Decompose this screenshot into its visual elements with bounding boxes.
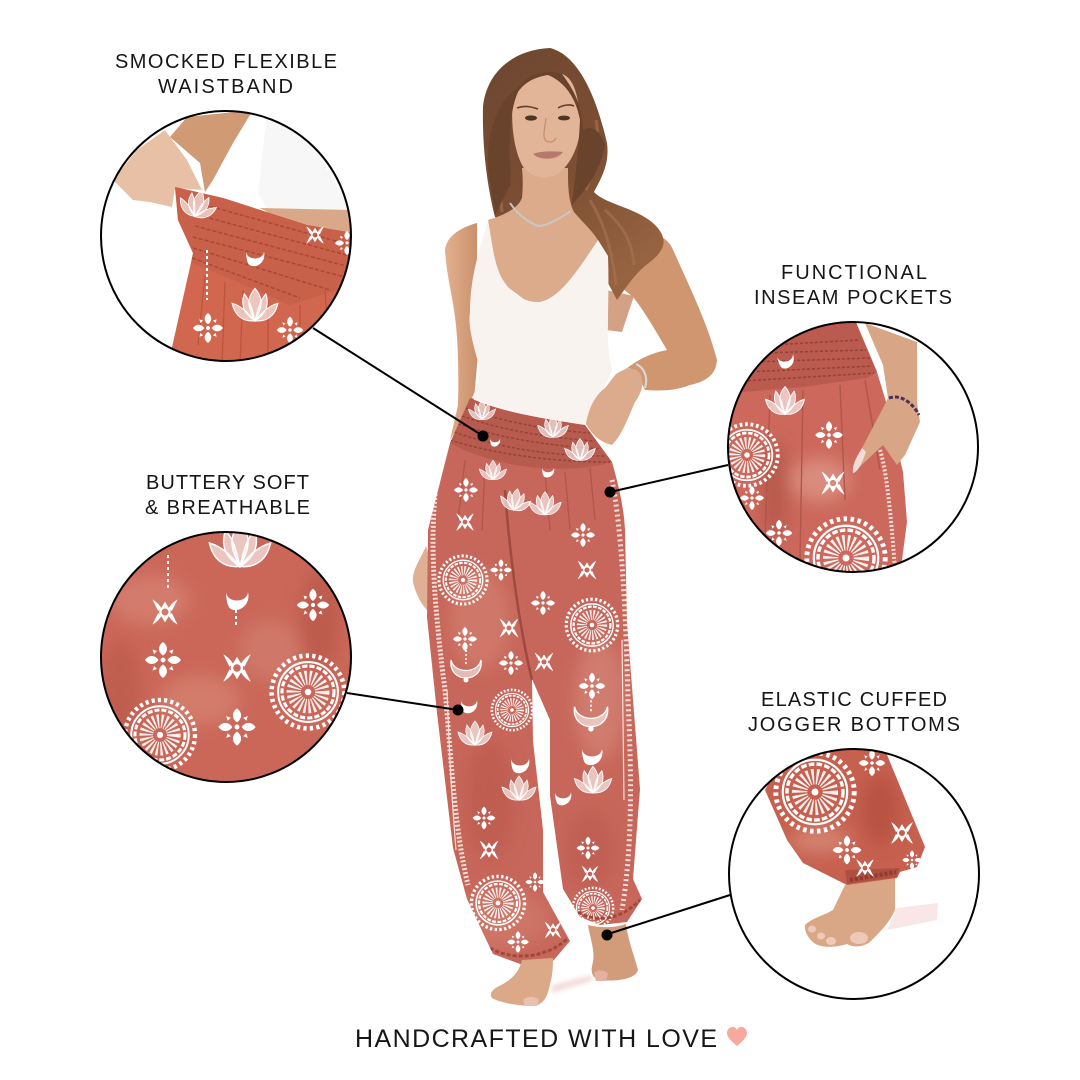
right hand [586,368,642,445]
detail photo circle [729,745,979,999]
heading: FUNCTIONAL [781,262,927,284]
cuff gather [490,900,640,956]
heading: & BREATHABLE [145,497,310,519]
print motifs [439,400,618,953]
torso back skin [606,290,634,332]
heading: WAISTBAND [158,76,293,98]
heading: INSEAM POCKETS [754,287,952,309]
detail photo circle [100,523,351,782]
callout: functional inseam pockets [727,265,979,573]
smocked waistband [450,398,612,469]
gathered folds [458,460,595,530]
mottled fabric tone [450,570,626,950]
detail photo circle [101,110,359,365]
model figure [413,48,717,1006]
heading: SMOCKED FLEXIBLE [115,51,337,73]
hair back [483,48,664,300]
detail photo circle [727,321,979,573]
bracelet [628,364,646,388]
side trim [433,478,630,910]
hair highlights [498,120,634,285]
pants [420,390,650,975]
heading: ELASTIC CUFFED [761,689,947,711]
heading: JOGGER BOTTOMS [748,714,960,736]
left arm [445,223,480,440]
right arm [612,234,717,390]
heading: BUTTERY SOFT [146,472,309,494]
right foot [588,924,638,981]
left foot [491,958,553,1006]
icon: heart [727,1027,747,1046]
left hand [413,546,430,610]
tagline: HANDCRAFTED WITH LOVE [355,1025,717,1053]
callout: smocked flexible waistband [101,51,359,365]
brows, eyes, nose, lips [517,105,574,159]
floor shadow [552,975,592,993]
neck and chest [488,168,600,306]
center fold [505,490,532,680]
hair front [488,72,605,215]
necklace [510,203,571,226]
callout: buttery soft and breathable [100,472,351,782]
callout: elastic cuffed jogger bottoms [729,689,979,999]
white bodysuit [469,220,612,426]
face [512,74,580,178]
connector lines with dots [313,328,730,940]
